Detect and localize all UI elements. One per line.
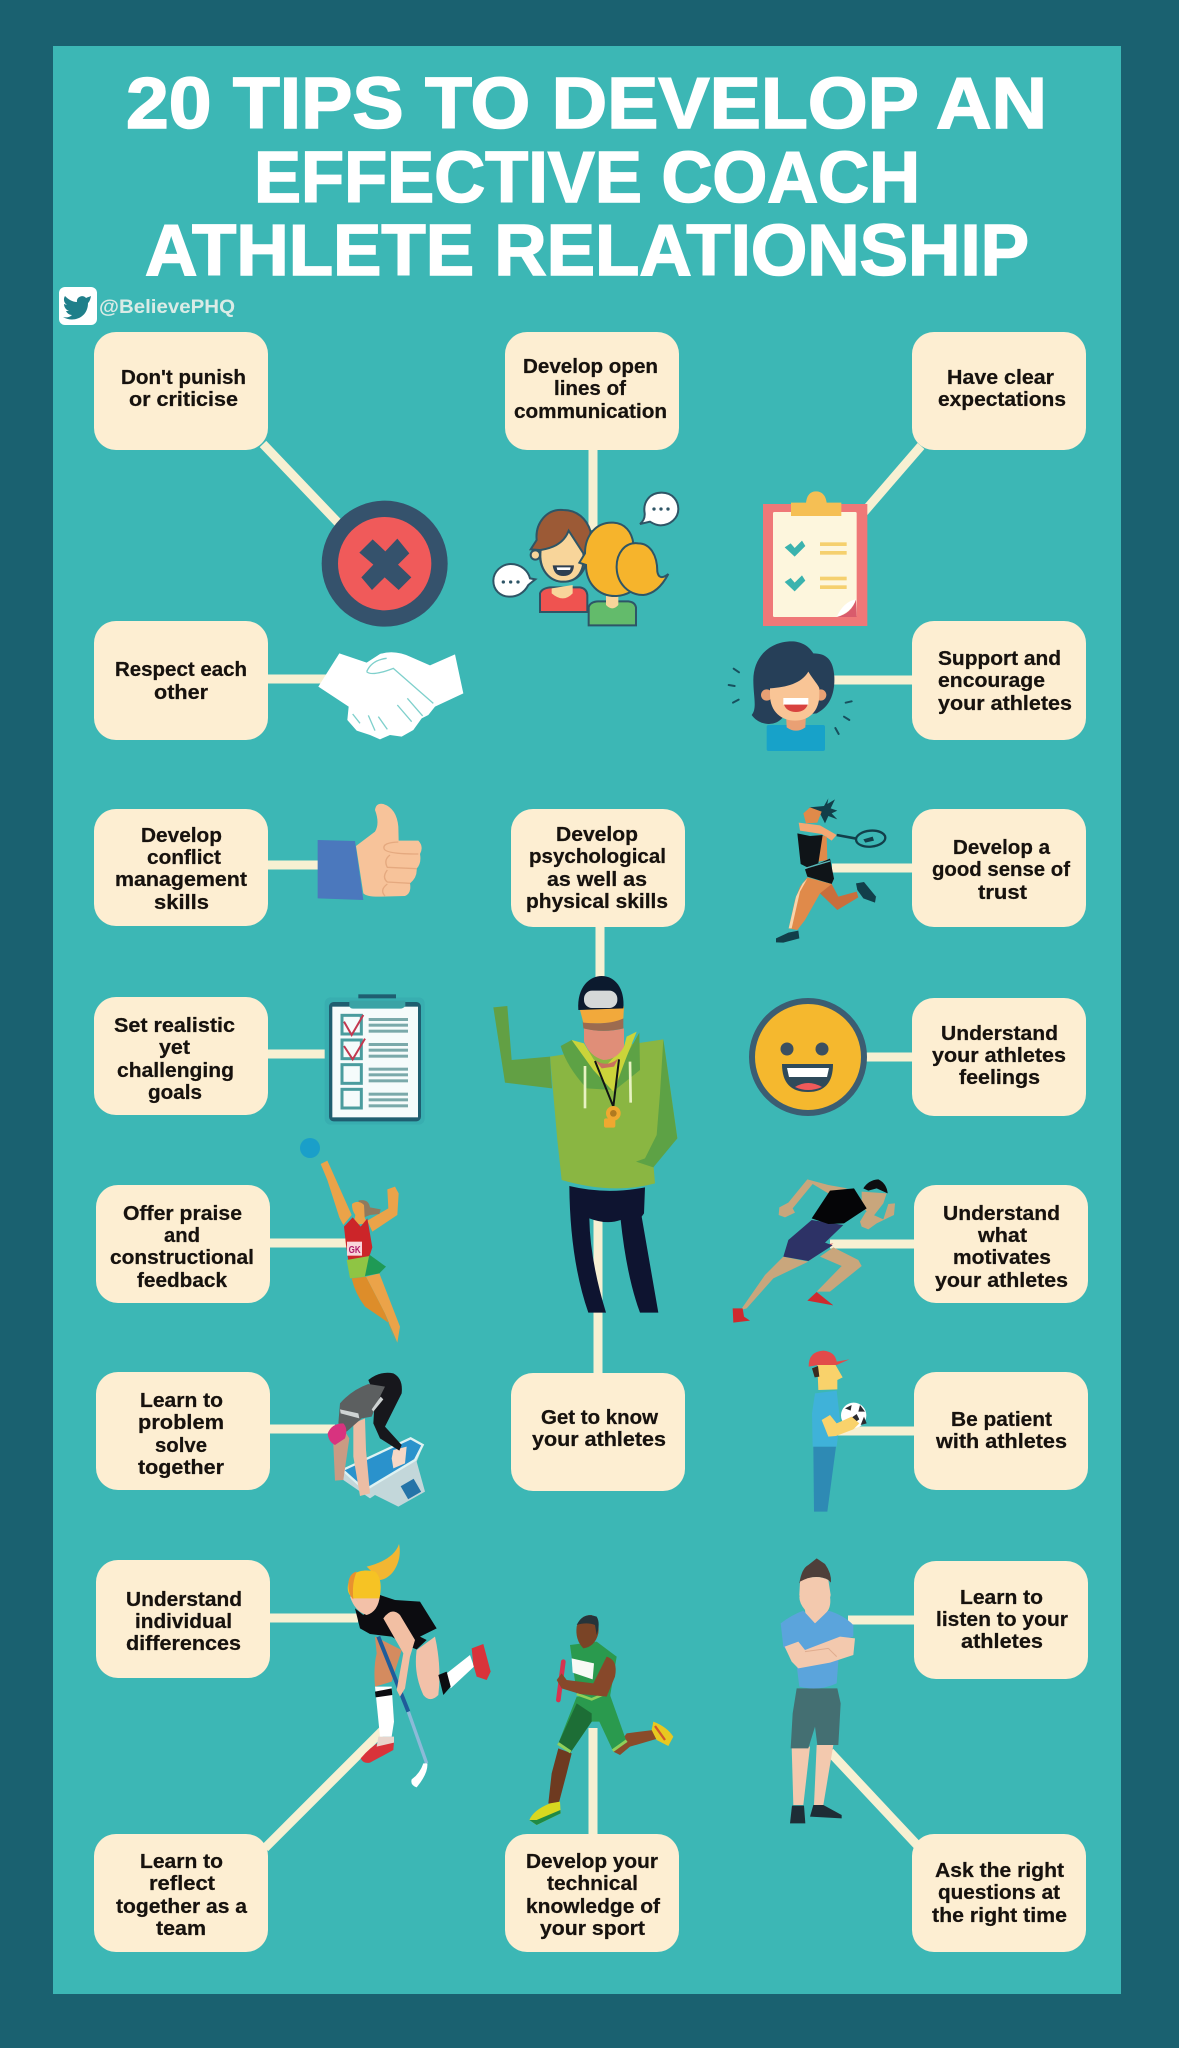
tip: reflect: team xyxy=(156,1917,206,1940)
tip: right questions xyxy=(912,1834,1086,1952)
tip: listen: listen to your xyxy=(936,1608,1068,1631)
tip: technical knowledge: knowledge of xyxy=(526,1895,660,1918)
icon: relay runner xyxy=(529,1615,673,1825)
tip: listen: athletes xyxy=(961,1630,1043,1653)
tip: patient: Be patient xyxy=(951,1408,1052,1431)
tip: support: Support and xyxy=(938,647,1061,670)
tip: problem solve xyxy=(96,1372,270,1490)
tip: conflict: management xyxy=(115,868,247,891)
icon: netball player xyxy=(300,1138,400,1343)
tip: feelings: Understand xyxy=(941,1022,1058,1045)
tip: reflect: reflect xyxy=(149,1872,215,1895)
tip: Don't punish: or criticise xyxy=(129,388,238,411)
icon: smiling woman xyxy=(729,641,852,751)
tip: Don't punish xyxy=(94,332,268,450)
tip: right questions: questions at xyxy=(938,1881,1060,1904)
tip: listen: Learn to xyxy=(960,1586,1043,1609)
tip: motivates: motivates xyxy=(953,1246,1051,1269)
tip: goals: yet xyxy=(159,1036,190,1059)
icon: red cross circle xyxy=(322,501,448,627)
title: EFFECTIVE COACH xyxy=(254,138,920,218)
title: ATHLETE RELATIONSHIP xyxy=(145,211,1029,291)
tip: conflict: conflict xyxy=(147,846,221,869)
tip: conflict: Develop xyxy=(141,824,222,847)
tip: problem solve: solve xyxy=(155,1434,207,1457)
tip: right questions: the right time xyxy=(932,1904,1067,1927)
icon: thumbs up xyxy=(318,804,422,900)
tip: reflect: Learn to xyxy=(140,1850,223,1873)
tip: goals: challenging xyxy=(117,1059,234,1082)
tip: motivates: what xyxy=(977,1224,1027,1247)
tip: goals: Set realistic xyxy=(114,1014,235,1037)
tip: clear expectations: Have clear xyxy=(947,366,1054,389)
tip: respect: other xyxy=(154,681,208,704)
tip: support: your athletes xyxy=(938,692,1072,715)
tip: trust: good sense of xyxy=(932,858,1070,881)
icon: tennis player xyxy=(776,798,886,943)
icon: hockey player xyxy=(348,1544,491,1787)
connector lines xyxy=(263,444,921,1848)
tip: goals: goals xyxy=(148,1081,202,1104)
tip: psychological xyxy=(511,809,685,927)
tip: support: encourage xyxy=(938,669,1045,692)
tip: reflect xyxy=(94,1834,268,1952)
tip: Don't punish: Don't punish xyxy=(121,366,246,389)
tip: psychological: as well as xyxy=(547,868,647,891)
tip: feelings xyxy=(912,998,1086,1116)
tip: clear expectations: expectations xyxy=(938,388,1066,411)
tip: praise: Offer praise xyxy=(123,1202,242,1225)
tip: open lines: lines of xyxy=(554,377,626,400)
tip: problem solve: Learn to xyxy=(140,1389,223,1412)
tip: open lines: Develop open xyxy=(523,355,658,378)
icon: coach figure xyxy=(493,976,677,1313)
icon: checklist clipboard xyxy=(325,994,425,1125)
tip: psychological: physical skills xyxy=(526,890,668,913)
twitter handle: @BelievePHQ xyxy=(99,297,235,318)
tip: praise: constructional xyxy=(110,1246,254,1269)
tip: right questions: Ask the right xyxy=(935,1859,1064,1882)
tip: differences: differences xyxy=(126,1632,241,1655)
icon: man with football xyxy=(809,1351,867,1512)
tip: patient xyxy=(914,1372,1088,1490)
tip: technical knowledge: technical xyxy=(547,1872,638,1895)
tip: patient: with athletes xyxy=(935,1430,1067,1453)
tip: respect xyxy=(94,621,268,740)
tip: reflect: together as a xyxy=(116,1895,248,1918)
tip: support xyxy=(912,621,1086,740)
tip: motivates xyxy=(914,1185,1088,1303)
tip: goals xyxy=(94,997,268,1115)
tip: feelings: your athletes xyxy=(932,1044,1066,1067)
tip: trust: Develop a xyxy=(953,836,1051,859)
icon: swimmer on block xyxy=(328,1373,425,1507)
tip: praise: feedback xyxy=(137,1269,228,1292)
tip: conflict xyxy=(94,809,268,926)
tip: respect: Respect each xyxy=(115,658,247,681)
tip: differences: Understand xyxy=(126,1588,242,1611)
tip: motivates: your athletes xyxy=(935,1269,1068,1292)
tip: get to know xyxy=(511,1373,685,1491)
tip: motivates: Understand xyxy=(943,1202,1060,1225)
tip: technical knowledge xyxy=(505,1834,679,1952)
twitter handle xyxy=(59,287,235,325)
tip: praise xyxy=(96,1185,270,1303)
icon: two people talking xyxy=(493,493,678,625)
tip: problem solve: problem xyxy=(138,1411,224,1434)
tip: psychological: psychological xyxy=(529,845,666,868)
title: 20 TIPS TO DEVELOP AN xyxy=(126,64,1047,144)
tip: trust xyxy=(912,809,1086,927)
tip: open lines: communication xyxy=(514,400,667,423)
icon: netball player: GK xyxy=(349,1245,361,1256)
icon: handshake xyxy=(318,652,463,739)
tip: clear expectations xyxy=(912,332,1086,450)
tip: trust: trust xyxy=(978,881,1027,904)
tip: psychological: Develop xyxy=(556,823,638,846)
icon: sprinter xyxy=(733,1179,895,1323)
tip: feelings: feelings xyxy=(959,1066,1040,1089)
tip: listen xyxy=(914,1561,1088,1679)
icon: emoji face xyxy=(752,1001,864,1113)
tip: technical knowledge: Develop your xyxy=(526,1850,658,1873)
tip: technical knowledge: your sport xyxy=(540,1917,645,1940)
tip: open lines xyxy=(505,332,679,450)
tip: differences: individual xyxy=(135,1610,232,1633)
title xyxy=(126,64,1047,291)
tip: problem solve: together xyxy=(138,1456,224,1479)
tip: get to know: your athletes xyxy=(532,1428,666,1451)
icon: clipboard with ticks xyxy=(763,491,867,626)
tip: conflict: skills xyxy=(154,891,209,914)
tip: get to know: Get to know xyxy=(541,1406,658,1429)
tip: differences xyxy=(96,1560,270,1678)
tip: praise: and xyxy=(164,1224,200,1247)
icon: man with folded arms xyxy=(781,1558,855,1823)
